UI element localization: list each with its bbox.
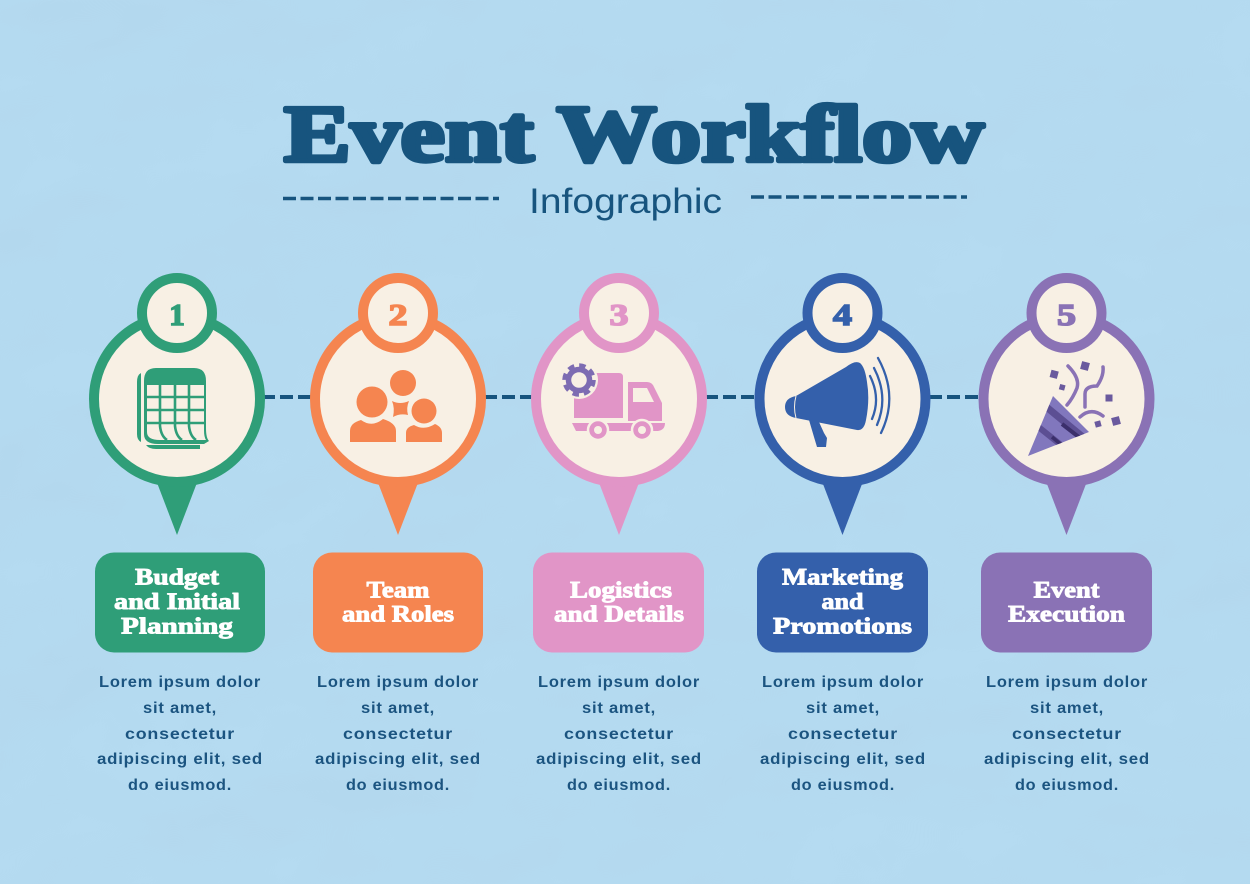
text block: step 1 description [97,674,263,794]
step 3: logistics pin [536,278,702,535]
icon: calendar [137,368,209,449]
text block: step 4 description: consectetur [788,726,898,743]
label: Event Execution: Event [1034,578,1100,604]
label: Team and Roles: Team [366,578,430,604]
text block: step 1 description: consectetur [125,726,235,743]
text block: step 5 description: do eiusmod. [1015,777,1119,794]
icon: party popper [1028,361,1121,456]
text block: step 5 description [984,674,1150,794]
text block: step 5 description: Lorem ipsum dolor [986,674,1148,691]
text block: step 3 description: adipiscing elit, sed [536,751,702,768]
text block: step 2 description: sit amet, [361,700,435,717]
text block: step 2 description: do eiusmod. [346,777,450,794]
step number 3: 3 [610,297,628,332]
step 1: budget pin [94,278,260,535]
label: Logistics and Details: Logistics [570,578,672,604]
step 5: execution pin [984,278,1150,535]
text block: step 1 description: adipiscing elit, sed [97,751,263,768]
step number 5: 5 [1057,297,1076,332]
label: Event Execution [981,552,1152,652]
text block: step 4 description: sit amet, [806,700,880,717]
title: Event Workflow [284,89,985,179]
text block: step 4 description: do eiusmod. [791,777,895,794]
text block: step 3 description: Lorem ipsum dolor [538,674,700,691]
label: Marketing and Promotions: Promotions [773,614,912,640]
text block: step 5 description: consectetur [1012,726,1122,743]
text block: step 5 description: sit amet, [1030,700,1104,717]
step number 1: 1 [169,297,185,332]
step 2: team pin [315,278,481,535]
text block: step 4 description: Lorem ipsum dolor [762,674,924,691]
label: Marketing and Promotions: and [822,589,864,615]
label: Marketing and Promotions [757,552,928,652]
connector: dashed timeline [262,395,980,399]
text block: step 3 description: do eiusmod. [567,777,671,794]
text block: step 1 description: sit amet, [143,700,217,717]
icon: delivery truck with gear [560,361,665,440]
text block: step 3 description [536,674,702,794]
label: Logistics and Details [533,552,704,652]
text block: step 5 description: adipiscing elit, sed [984,751,1150,768]
step number 2: 2 [388,297,408,332]
text block: step 2 description: adipiscing elit, sed [315,751,481,768]
label: Budget and Initial Planning: and Initial [114,589,241,615]
label: Team and Roles: and Roles [342,602,454,628]
icon: megaphone [785,358,889,447]
text block: step 1 description: do eiusmod. [128,777,232,794]
label: Budget and Initial Planning: Budget [135,564,219,590]
text block: step 2 description: Lorem ipsum dolor [317,674,479,691]
text block: step 4 description: adipiscing elit, sed [760,751,926,768]
text block: step 3 description: consectetur [564,726,674,743]
subtitle with dashed rules: Infographic [529,182,722,221]
icon: team of people [350,370,442,442]
step number 4: 4 [833,297,852,332]
label: Budget and Initial Planning [95,552,265,652]
text block: step 2 description [315,674,481,794]
label: Team and Roles [313,552,483,652]
label: Marketing and Promotions: Marketing [782,564,903,590]
label: Event Execution: Execution [1008,602,1125,628]
label: Logistics and Details: and Details [554,602,684,628]
text block: step 4 description [760,674,926,794]
step 4: marketing pin [760,278,926,535]
text block: step 1 description: Lorem ipsum dolor [99,674,261,691]
label: Budget and Initial Planning: Planning [121,614,233,640]
text block: step 2 description: consectetur [343,726,453,743]
text block: step 3 description: sit amet, [582,700,656,717]
